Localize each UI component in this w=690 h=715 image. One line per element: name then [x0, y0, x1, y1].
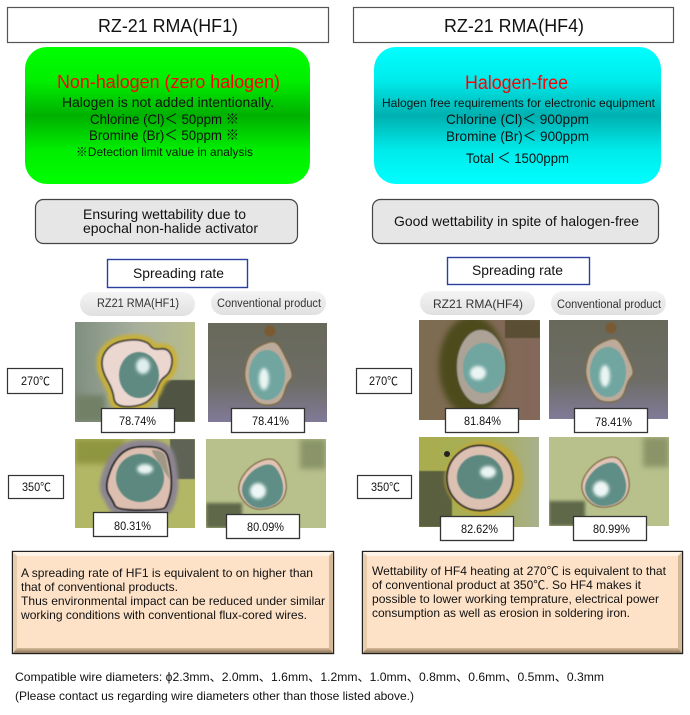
text: halogen-free limits — [382, 96, 656, 166]
panel: halogen-free definition — [374, 47, 661, 184]
value: HF4 350C: 82.62% — [461, 522, 498, 536]
text: halogen-free limits: Chlorine (Cl)＜ 900ppm — [446, 111, 589, 127]
photo: conventional at 270C — [208, 323, 327, 422]
label: 350C HF1 row: 350℃ — [22, 482, 51, 494]
label: 270C HF1 row: 270℃ — [21, 376, 50, 388]
heading: non-halogen: Non-halogen (zero halogen) — [57, 72, 280, 92]
value: HF4 270C — [446, 408, 518, 432]
photo: HF1 at 350C — [75, 439, 195, 528]
callout: HF4 wettability — [372, 200, 658, 244]
text: non-halogen limits: ※Detection limit value in analysis — [76, 145, 253, 159]
column label: conventional product — [211, 291, 326, 315]
value: HF4 270C: 81.84% — [464, 414, 501, 428]
callout: HF1 wettability — [36, 200, 298, 244]
panel: HF1 summary — [12, 552, 334, 654]
value: conventional 350C: 80.09% — [247, 520, 284, 534]
value: HF1 350C — [94, 512, 168, 536]
value: HF1 270C: 78.74% — [119, 414, 156, 428]
panel: HF4 summary — [362, 552, 682, 654]
title: RZ-21 RMA(HF1) — [8, 8, 328, 42]
text: non-halogen limits: Halogen is not added intentionally. — [62, 94, 274, 110]
photo: conventional at 350C — [549, 437, 669, 526]
photo: HF1 at 270C — [75, 322, 195, 422]
callout: HF1 wettability: Ensuring wettability due to — [83, 206, 246, 222]
text: halogen-free limits: Total ＜ 1500ppm — [466, 150, 569, 166]
column label: RZ21 RMA(HF4) — [420, 291, 535, 315]
label: 270C HF4 row: 270℃ — [369, 376, 398, 388]
label: 350C HF1 row — [8, 476, 64, 498]
panel: HF1 summary: Thus environmental impact can be reduced under similar — [21, 594, 325, 608]
heading: spreading rate HF1: Spreading rate — [133, 265, 224, 281]
panel: HF1 summary: that of conventional products. — [21, 580, 178, 594]
label: 350C HF4 row — [358, 476, 412, 498]
label: 350C HF4 row: 350℃ — [371, 482, 400, 494]
heading: spreading rate HF1 — [108, 260, 248, 288]
panel: HF1 summary: A spreading rate of HF1 is equivalent to on higher than — [21, 566, 313, 580]
panel: HF4 summary: Wettability of HF4 heating at 270℃ is equivalent to that — [372, 564, 667, 578]
column label: RZ21 RMA(HF1): RZ21 RMA(HF1) — [97, 298, 179, 310]
text: halogen-free limits: Bromine (Br)＜ 900ppm — [446, 128, 589, 144]
title: RZ-21 RMA(HF4): RZ-21 RMA(HF4) — [444, 16, 584, 36]
column label: conventional product: Conventional product — [557, 299, 662, 311]
title: RZ-21 RMA(HF1): RZ-21 RMA(HF1) — [98, 16, 238, 36]
text: non-halogen limits — [62, 94, 274, 159]
value: HF4 350C — [440, 516, 514, 540]
panel: HF4 summary: of conventional product at 350℃. So HF4 makes it — [372, 578, 642, 592]
photo: conventional at 270C — [549, 320, 668, 419]
value: conventional 350C — [226, 514, 300, 538]
title: RZ-21 RMA(HF4) — [354, 8, 674, 42]
panel: HF4 summary: consumption as well as erosion in soldering iron. — [372, 606, 630, 620]
footnote: compatible wire diameters: (Please contact us regarding wire diameters other than those listed above.) — [15, 689, 414, 703]
column label: conventional product — [551, 291, 666, 315]
value: HF1 350C: 80.31% — [114, 519, 151, 533]
column label: RZ21 RMA(HF4): RZ21 RMA(HF4) — [433, 297, 523, 311]
photo: conventional at 350C — [206, 439, 326, 528]
heading: spreading rate HF4: Spreading rate — [472, 262, 563, 278]
value: conventional 350C — [574, 516, 646, 540]
footnote: compatible wire diameters: Compatible wire diameters: ϕ2.3mm、2.0mm、1.6mm、1.2mm、1.0mm、0.8mm、0.6mm、0.5mm、0.3mm — [15, 670, 604, 684]
text: non-halogen limits: Chlorine (Cl)＜ 50ppm ※ — [90, 111, 239, 127]
panel: non-halogen definition — [25, 47, 310, 184]
callout: HF4 wettability: Good wettability in spite of halogen-free — [394, 213, 639, 229]
label: 270C HF1 row — [8, 368, 62, 394]
value: conventional 270C: 78.41% — [595, 415, 632, 429]
text: halogen-free limits: Halogen free requirements for electronic equipment — [382, 96, 656, 110]
value: conventional 350C: 80.99% — [593, 522, 630, 536]
label: 270C HF4 row — [356, 368, 412, 394]
panel: HF1 summary: working conditions with conventional flux-cored wires. — [20, 608, 307, 622]
value: conventional 270C — [232, 408, 304, 432]
photo: HF4 at 270C — [419, 316, 540, 420]
column label: conventional product: Conventional product — [217, 298, 322, 310]
footnote: compatible wire diameters — [15, 670, 604, 703]
callout: HF1 wettability: epochal non-halide activator — [83, 220, 258, 236]
text: non-halogen limits: Bromine (Br)＜ 50ppm ※ — [89, 127, 239, 143]
column label: RZ21 RMA(HF1) — [80, 292, 195, 316]
value: HF1 270C — [102, 408, 174, 432]
heading: spreading rate HF4 — [448, 258, 590, 284]
value: conventional 270C: 78.41% — [252, 414, 289, 428]
heading: halogen-free: Halogen-free — [465, 73, 568, 94]
value: conventional 270C — [574, 408, 648, 432]
panel: HF4 summary: possible to lower working temprature, electrical power — [372, 592, 659, 606]
photo: HF4 at 350C — [419, 437, 539, 527]
